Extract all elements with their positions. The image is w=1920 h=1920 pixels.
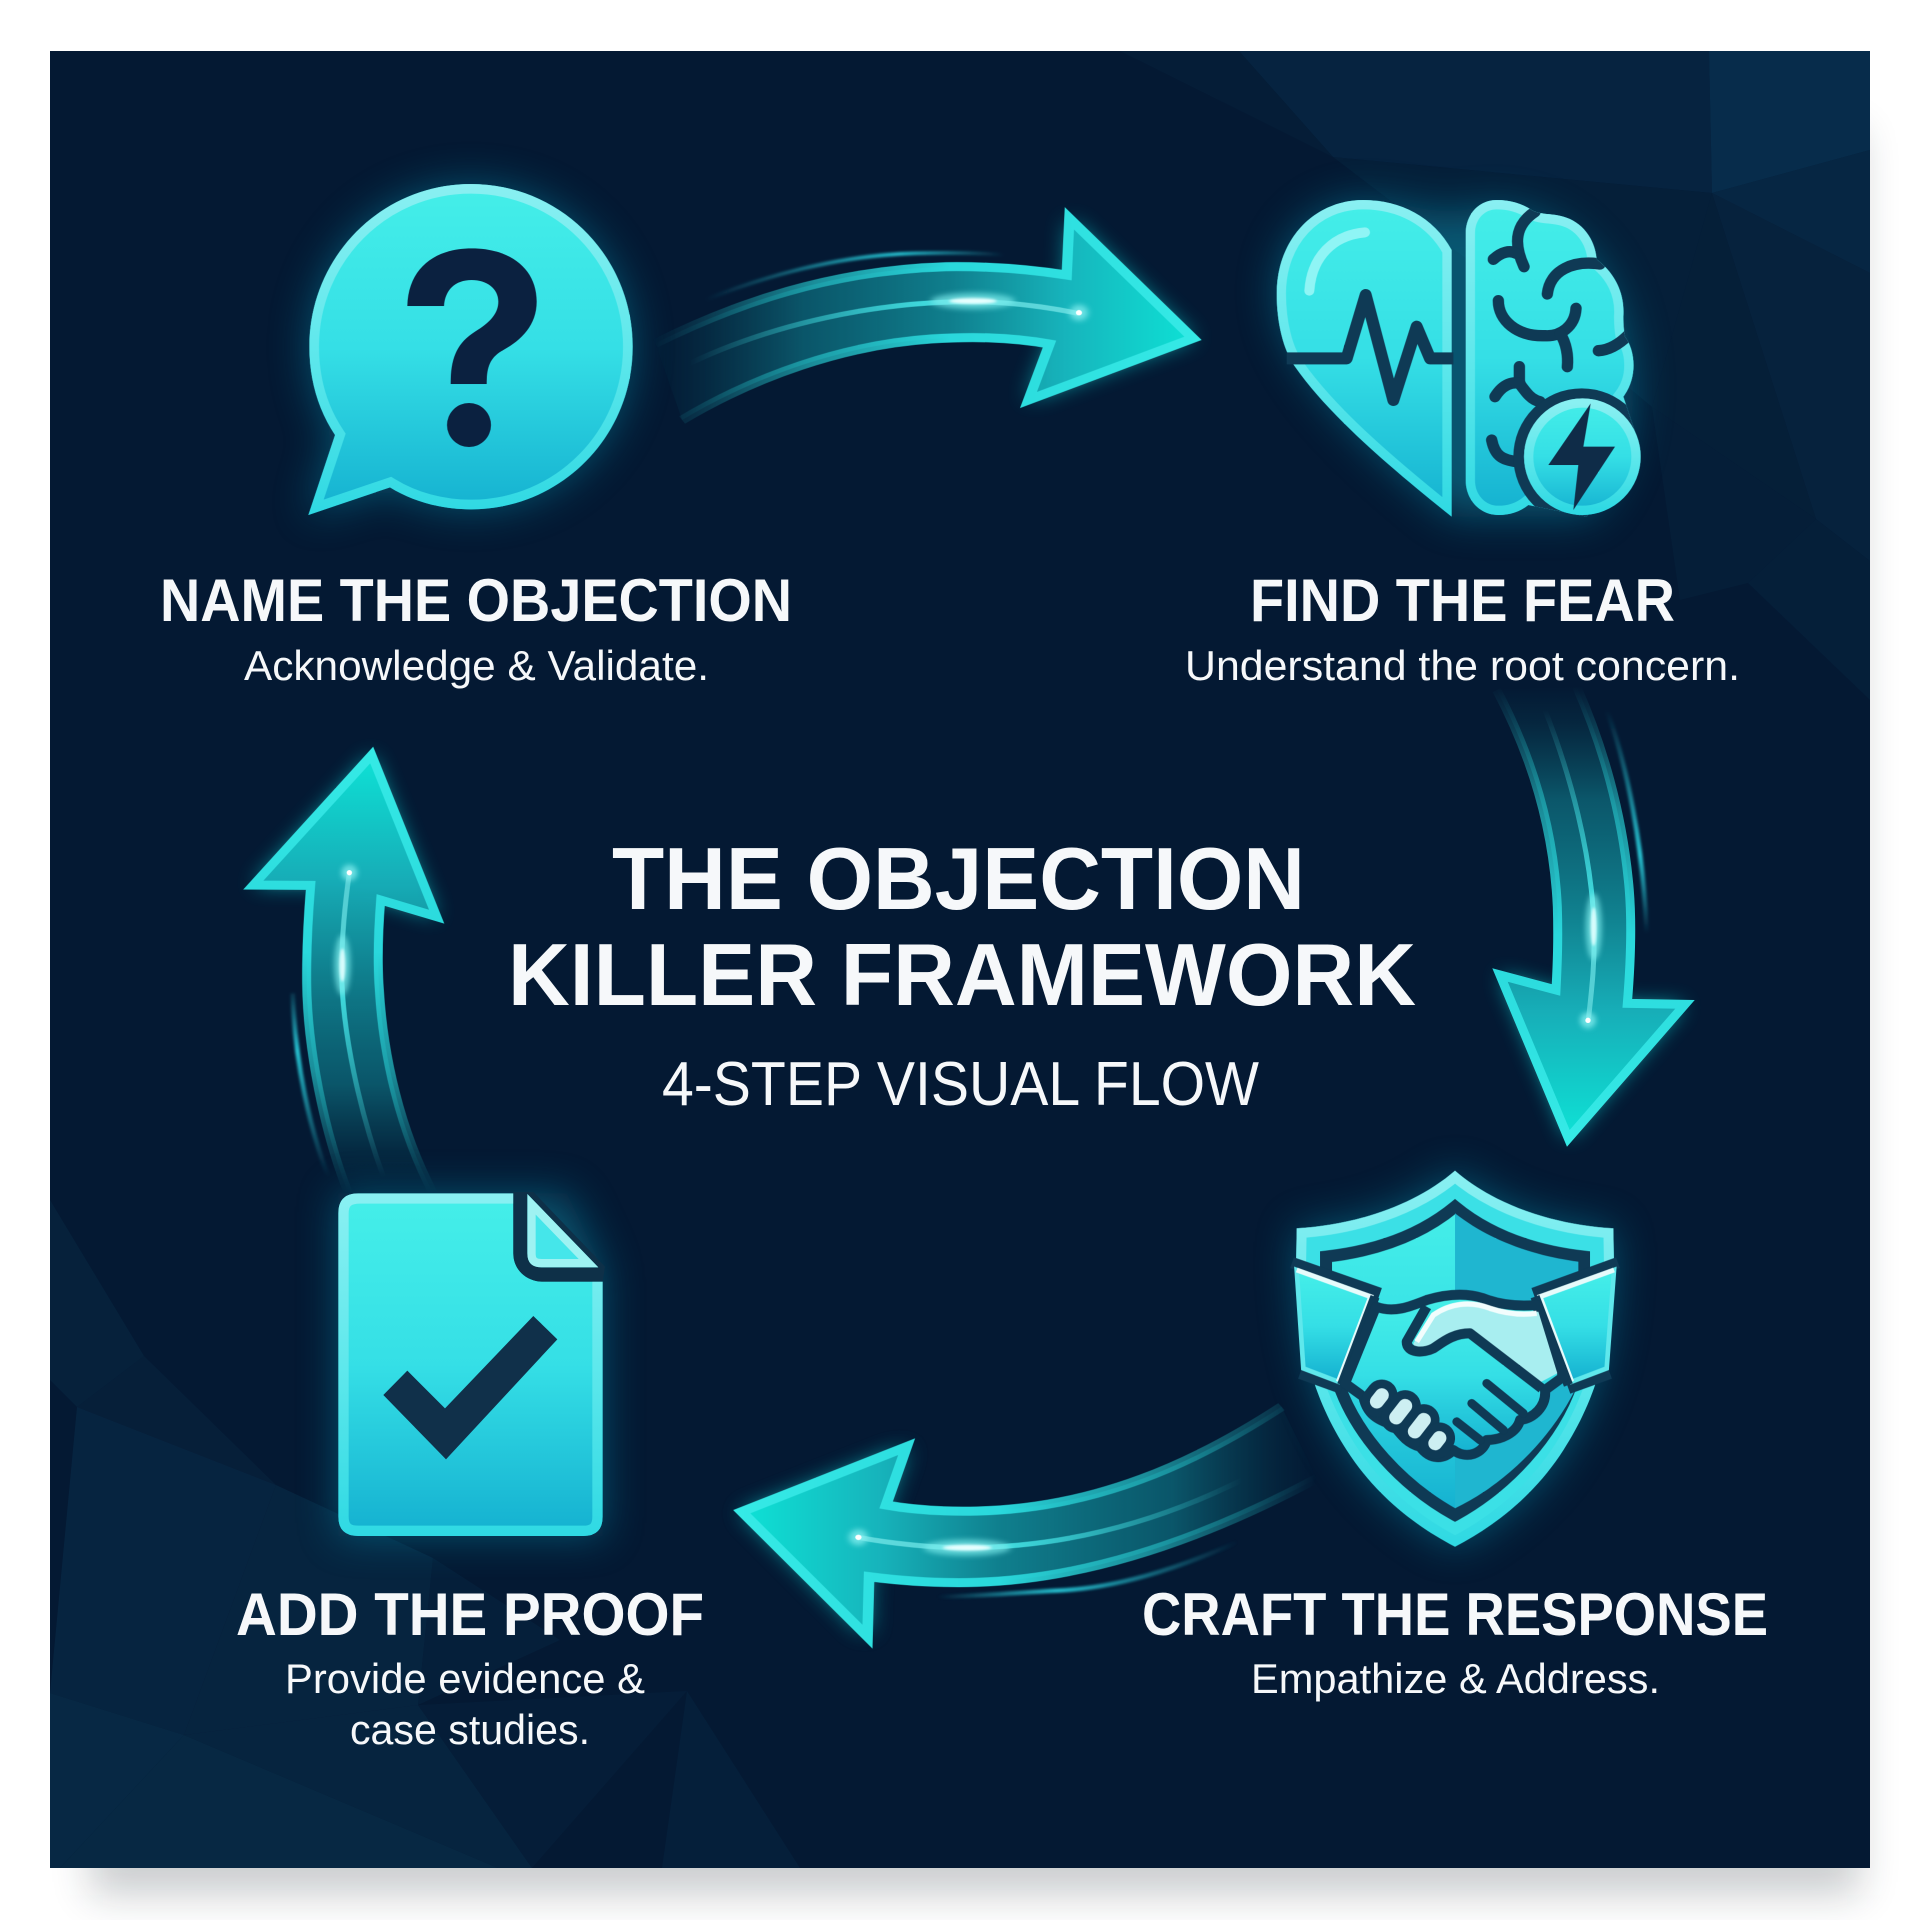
inner shield: [1326, 1207, 1584, 1515]
arrow: step 1 to step 2: [655, 218, 1193, 420]
arrow: step 4 to step 1: [253, 755, 437, 1193]
heart half: [1277, 200, 1453, 517]
lightning badge: [1524, 398, 1641, 515]
step 1 label: Acknowledge & Validate.: [244, 642, 709, 689]
arrow: step 3 to step 4: [742, 1407, 1317, 1637]
folded corner: [513, 1192, 605, 1282]
step 3 label: CRAFT THE RESPONSE: [1142, 1581, 1768, 1648]
icon: heart and brain with bolt: [1277, 200, 1650, 525]
title: KILLER FRAMEWORK: [508, 925, 1416, 1024]
step 4 label: Provide evidence &: [285, 1655, 645, 1702]
step 2 label: [1185, 567, 1740, 689]
handshake: [1345, 1295, 1563, 1459]
cuffs: [1292, 1263, 1618, 1388]
subtitle: 4-STEP VISUAL FLOW: [662, 1050, 1259, 1119]
step 1 label: NAME THE OBJECTION: [160, 567, 792, 634]
step 4 label: [236, 1581, 704, 1753]
step 4 label: ADD THE PROOF: [236, 1581, 704, 1648]
check mark: [383, 1316, 557, 1459]
step 2 label: FIND THE FEAR: [1250, 567, 1675, 634]
title: THE OBJECTION: [612, 829, 1305, 928]
question mark glyph: [407, 248, 537, 447]
icon: shield with handshake: [1292, 1171, 1618, 1547]
title: [508, 829, 1416, 1024]
step 3 label: Empathize & Address.: [1251, 1655, 1660, 1702]
step 2 label: Understand the root concern.: [1185, 642, 1740, 689]
arrow: step 2 to step 3: [1497, 687, 1685, 1138]
icon: speech bubble with question mark: [308, 184, 633, 515]
icon: document with check: [338, 1192, 605, 1536]
brain half: [1466, 200, 1650, 525]
step 4 label: case studies.: [350, 1706, 590, 1753]
step 1 label: [160, 567, 792, 689]
step 3 label: [1142, 1581, 1768, 1702]
